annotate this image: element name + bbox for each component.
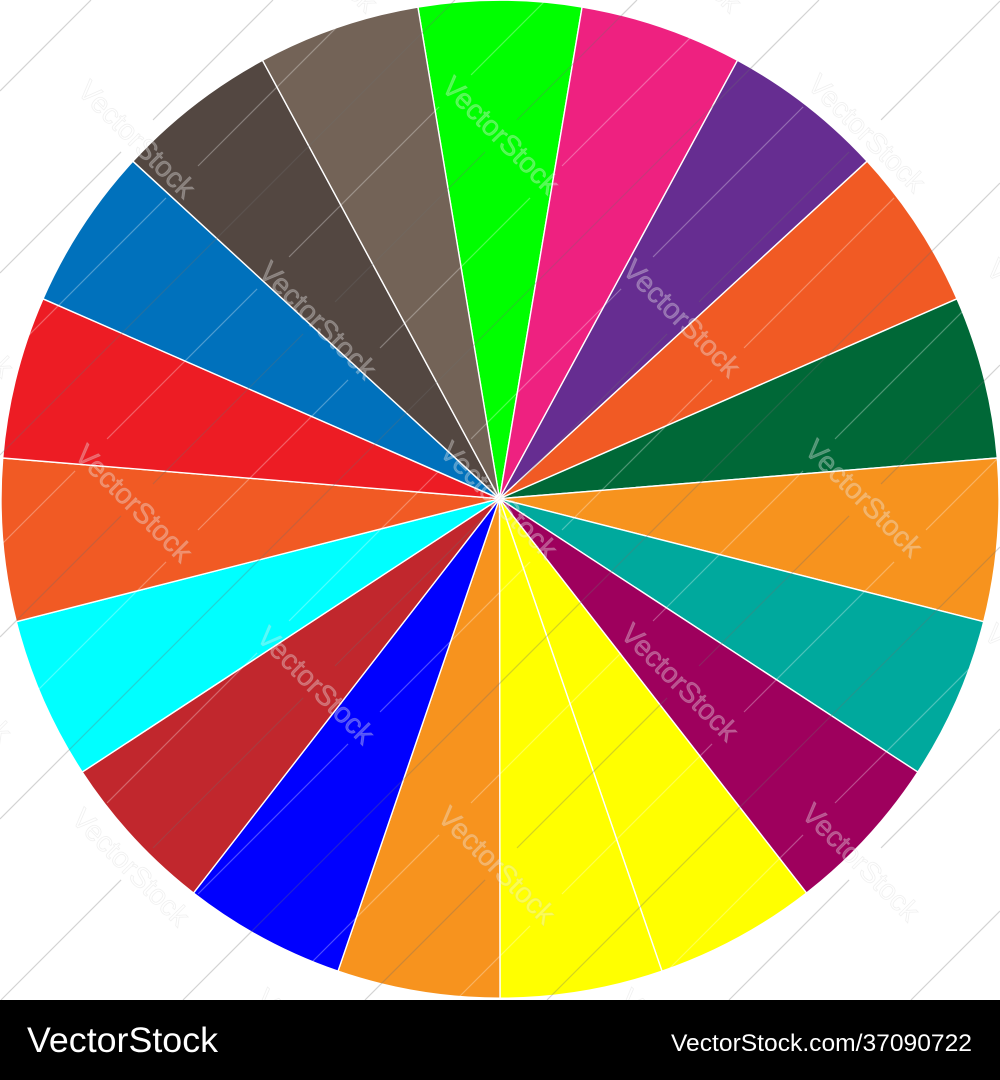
slice: orange: [500, 161, 957, 499]
slice: magenta: [500, 499, 918, 893]
slice: red: [3, 299, 499, 499]
watermark text grid: VectorStock: [614, 618, 745, 748]
slice: blue: [194, 499, 500, 971]
watermark text grid: VectorStock: [71, 75, 202, 205]
slice: orange left: [1, 458, 500, 622]
footer brand name: VectorStock: [27, 1020, 218, 1060]
slice: amber bottom: [338, 499, 500, 998]
slice: dark green: [500, 299, 997, 499]
slice: mid blue: [43, 161, 500, 499]
watermark text grid: VectorStock: [798, 434, 929, 564]
watermark text grid: Ve: [249, 983, 295, 1029]
footer bar: [0, 1000, 1000, 1080]
slice: brick red: [82, 499, 499, 893]
slice: teal: [500, 499, 984, 772]
slice: dark brown: [133, 60, 500, 499]
watermark text grid: VectorStock: [433, 436, 564, 566]
watermark text grid: VectorStock: [65, 803, 196, 933]
slice: cyan: [16, 499, 500, 772]
footer image id: VectorStock.com/37090722: [671, 1030, 972, 1057]
watermark text grid: VectorStock: [250, 621, 381, 751]
watermark text grid: VectorStock: [431, 801, 562, 931]
watermark text grid: Ve: [613, 983, 659, 1029]
watermark text grid: VectorStock: [435, 71, 566, 201]
slice: yellow right: [500, 499, 806, 971]
slice: taupe: [262, 7, 500, 499]
slice: pink: [500, 7, 738, 499]
watermark text grid: VectorStock: [68, 439, 199, 569]
slice: purple: [500, 60, 867, 499]
watermark text grid: VectorStock: [795, 798, 926, 928]
slice: yellow left: [500, 499, 662, 998]
watermark text grid: VectorStock: [252, 256, 383, 386]
slice: amber: [500, 458, 999, 622]
watermark text grid: VectorStock: [616, 254, 747, 384]
slice: green: [418, 0, 582, 499]
watermark text grid: VectorStock: [801, 69, 932, 199]
